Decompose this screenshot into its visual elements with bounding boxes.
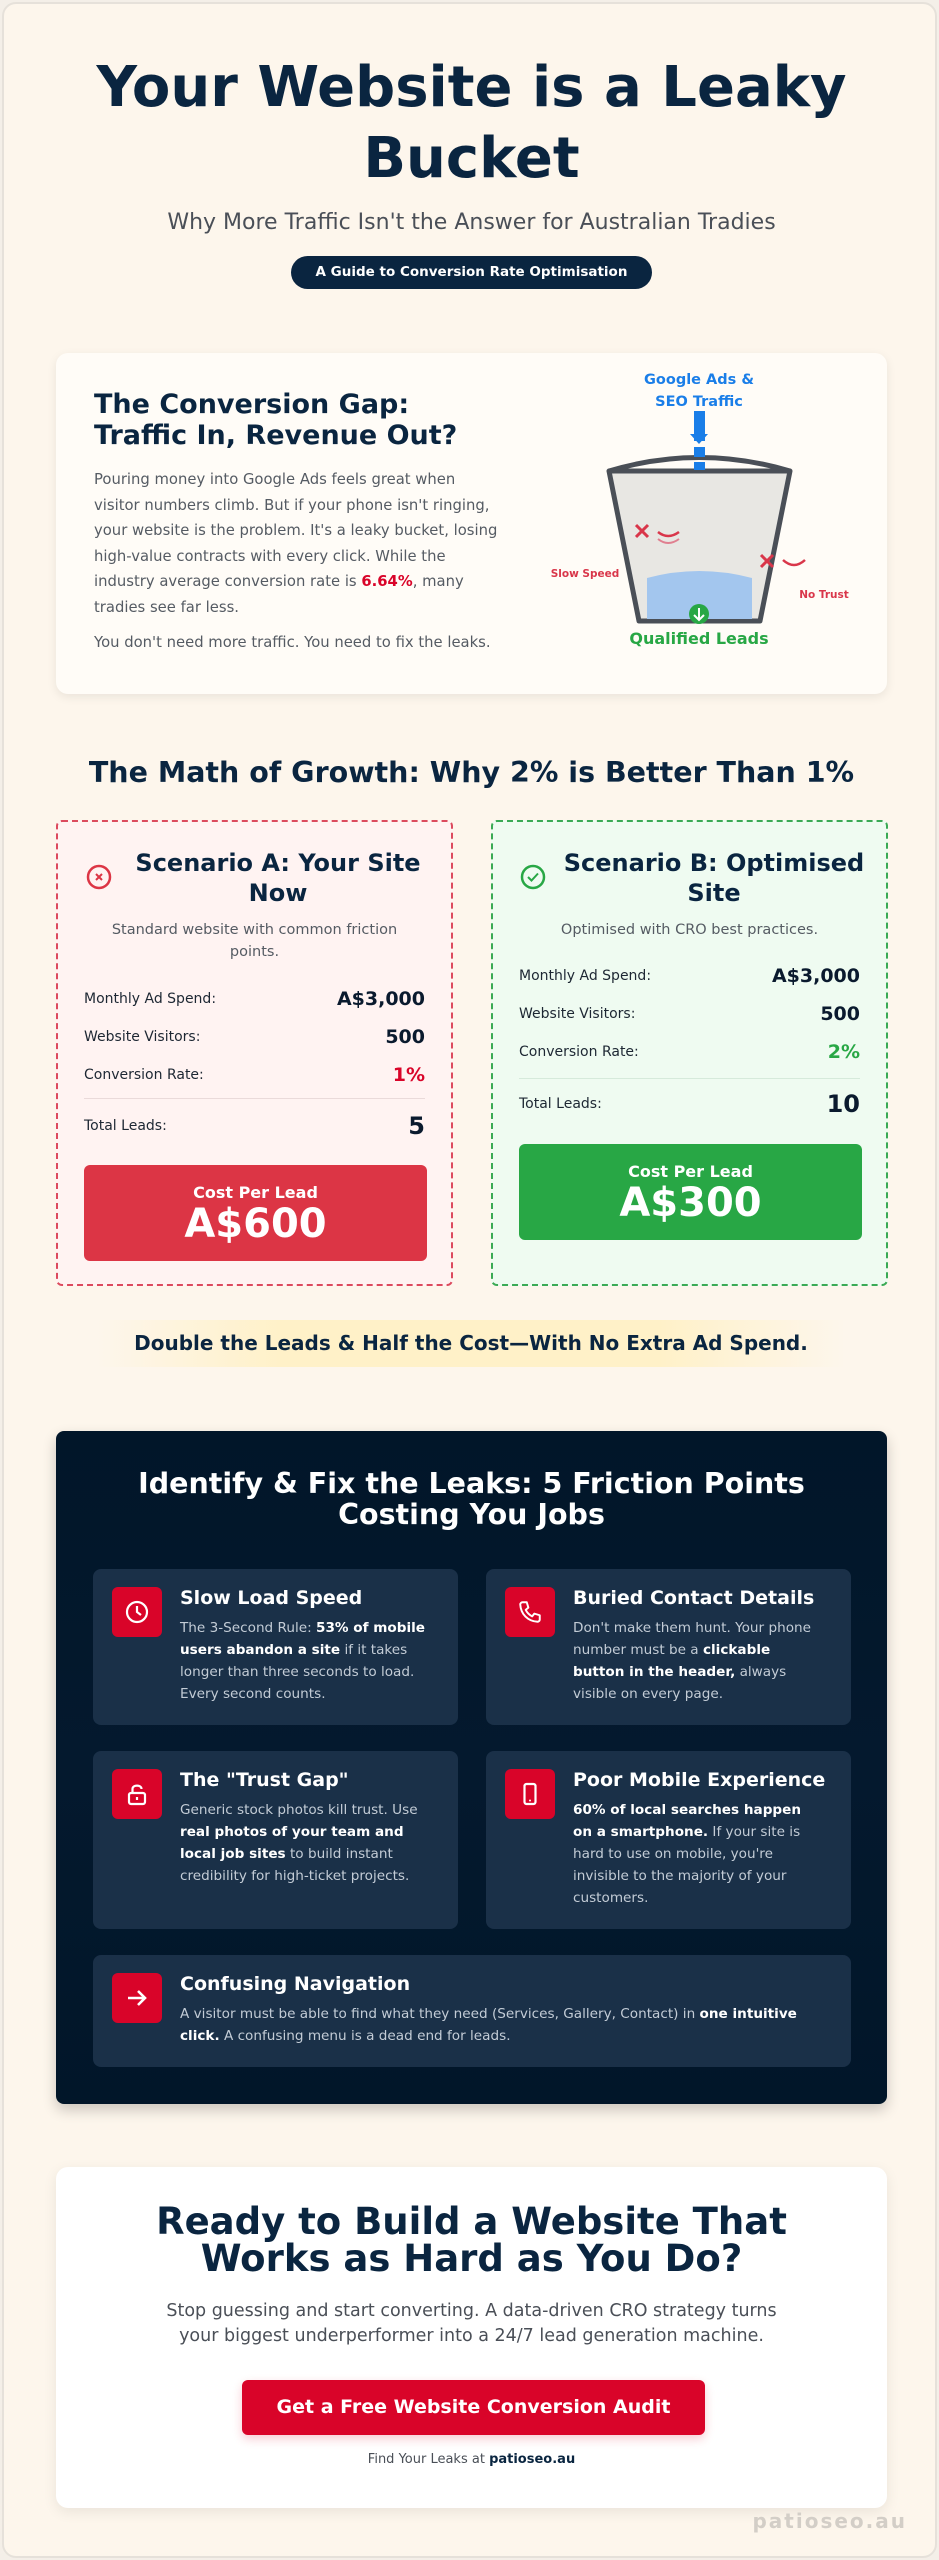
- friction heading: Costing You Jobs: [338, 1498, 605, 1531]
- body text: tradies see far less.: [94, 598, 239, 616]
- pill badge: [291, 256, 652, 289]
- card: poor mobile experience: [486, 1751, 851, 1929]
- CTA heading: Works as Hard as You Do?: [201, 2237, 742, 2280]
- cost per lead box A: Cost Per Lead: [193, 1183, 318, 1202]
- icon: check circle: [520, 864, 546, 890]
- scenario A title: [135, 849, 421, 907]
- panel: friction points: [56, 1431, 887, 2104]
- metrics: Monthly Ad Spend:: [519, 968, 651, 984]
- scenario A title: Now: [249, 879, 307, 907]
- card: confusing navigation: [93, 1955, 851, 2067]
- panel: conversion gap: [56, 353, 887, 694]
- body text: visitor numbers climb. But if your phone isn't ringing,: [94, 496, 489, 514]
- card: poor mobile experience: Poor Mobile Experience: [573, 1769, 825, 1791]
- metrics: 5: [408, 1112, 425, 1140]
- card: buried contact details: Buried Contact Details: [573, 1587, 814, 1609]
- scenario B subtitle: Optimised with CRO best practices.: [561, 922, 818, 938]
- metrics: 1%: [393, 1064, 425, 1086]
- cost per lead box B: [519, 1144, 862, 1240]
- icon: leaky bucket diagram: SEO Traffic: [655, 394, 743, 410]
- card: poor mobile experience: 60% of local searches happen on a smartphone. If your site is hard to use on mobile, you're invisible to the majority of your customers.: [573, 1802, 801, 1906]
- metrics: [518, 965, 860, 1118]
- card: slow load speed: The 3-Second Rule: 53% of mobile users abandon a site if it takes longer than three seconds to load. Every second counts.: [180, 1620, 425, 1702]
- cost per lead box B: Cost Per Lead: [628, 1162, 753, 1181]
- pill badge: A Guide to Conversion Rate Optimisation: [316, 264, 627, 280]
- panel: scenario B: [491, 820, 888, 1286]
- body text: industry average conversion rate is 6.64%, many: [94, 573, 464, 590]
- body text: your website is the problem. It's a leaky bucket, losing: [94, 522, 497, 539]
- card: trust gap: The "Trust Gap": [180, 1769, 349, 1791]
- CTA button: Get a Free Website Conversion Audit: [277, 2396, 670, 2418]
- icon: leaky bucket diagram: Qualified Leads: [629, 629, 769, 648]
- cost per lead box A: [84, 1165, 427, 1261]
- icon: clock: [112, 1587, 162, 1637]
- CTA heading: Ready to Build a Website That: [156, 2200, 787, 2243]
- heading: Traffic In, Revenue Out?: [94, 420, 457, 451]
- icon: leaky bucket diagram: [551, 372, 849, 648]
- metrics: 500: [820, 1003, 860, 1025]
- title: Bucket: [363, 126, 580, 191]
- icon: arrow: [112, 1973, 162, 2023]
- body text: [94, 471, 497, 616]
- scenario A title: Scenario A: Your Site: [135, 849, 421, 877]
- body text: Pouring money into Google Ads feels great when: [94, 471, 455, 488]
- title: Your Website is a Leaky: [96, 55, 846, 120]
- metrics: 10: [827, 1090, 860, 1118]
- metrics: Total Leads:: [519, 1096, 602, 1112]
- metrics: Conversion Rate:: [84, 1067, 204, 1083]
- metrics: Conversion Rate:: [519, 1044, 639, 1060]
- scenario B title: Scenario B: Optimised: [564, 849, 864, 877]
- scenario B title: [564, 849, 864, 907]
- icon: leaky bucket diagram: No Trust: [799, 589, 849, 601]
- icon: leaky bucket diagram: Google Ads &: [644, 372, 754, 388]
- scenario B title: Site: [687, 879, 741, 907]
- callout banner: [96, 1320, 846, 1367]
- subtitle: Why More Traffic Isn't the Answer for Australian Tradies: [167, 210, 776, 235]
- card: buried contact details: [486, 1569, 851, 1725]
- friction heading: [138, 1467, 805, 1531]
- footer link: Find Your Leaks at patioseo.au: [368, 2452, 575, 2467]
- card: trust gap: Generic stock photos kill trust. Use real photos of your team and local job sites to build instant credibility for high-ticket projects.: [180, 1802, 418, 1884]
- icon: lock: [112, 1769, 162, 1819]
- card: slow load speed: [93, 1569, 458, 1725]
- metrics: 500: [385, 1026, 425, 1048]
- metrics: Website Visitors:: [84, 1029, 200, 1045]
- scenario A subtitle: Standard website with common friction points.: [112, 922, 397, 960]
- icon: mobile: [505, 1769, 555, 1819]
- metrics: Website Visitors:: [519, 1006, 635, 1022]
- icon: phone: [505, 1587, 555, 1637]
- metrics: 2%: [828, 1041, 860, 1063]
- card: buried contact details: Don't make them hunt. Your phone number must be a clickable button in the header, always visible on every page.: [573, 1620, 811, 1702]
- panel: scenario A: [56, 820, 453, 1286]
- heading: The Conversion Gap:: [94, 389, 409, 420]
- watermark: patioseo.au: [752, 2509, 907, 2533]
- CTA text: Stop guessing and start converting. A data-driven CRO strategy turns your biggest underperformer into a 24/7 lead generation machine.: [166, 2301, 777, 2346]
- panel: call to action: [56, 2167, 887, 2508]
- metrics: A$3,000: [772, 965, 860, 987]
- closing line: You don't need more traffic. You need to fix the leaks.: [94, 634, 491, 651]
- card: trust gap: [93, 1751, 458, 1929]
- icon: x circle: [86, 864, 112, 890]
- card: confusing navigation: A visitor must be able to find what they need (Services, Gallery, Contact) in one intuitive click. A confusing menu is a dead end for leads.: [180, 2006, 797, 2044]
- metrics: [84, 988, 425, 1140]
- CTA button: [242, 2380, 705, 2435]
- callout banner: Double the Leads & Half the Cost—With No Extra Ad Spend.: [134, 1331, 808, 1355]
- friction heading: Identify & Fix the Leaks: 5 Friction Points: [138, 1467, 805, 1500]
- metrics: A$3,000: [337, 988, 425, 1010]
- cost per lead box B: A$300: [619, 1180, 762, 1226]
- heading: [94, 389, 457, 451]
- metrics: Total Leads:: [84, 1118, 167, 1134]
- title: [96, 55, 846, 191]
- CTA heading: [156, 2200, 787, 2280]
- section heading: math of growth: The Math of Growth: Why 2% is Better Than 1%: [89, 756, 854, 789]
- metrics: Monthly Ad Spend:: [84, 991, 216, 1007]
- body text: high-value contracts with every click. While the: [94, 548, 446, 564]
- card: slow load speed: Slow Load Speed: [180, 1587, 362, 1609]
- card: confusing navigation: Confusing Navigation: [180, 1973, 410, 1995]
- cost per lead box A: A$600: [184, 1201, 327, 1247]
- icon: leaky bucket diagram: Slow Speed: [551, 568, 619, 580]
